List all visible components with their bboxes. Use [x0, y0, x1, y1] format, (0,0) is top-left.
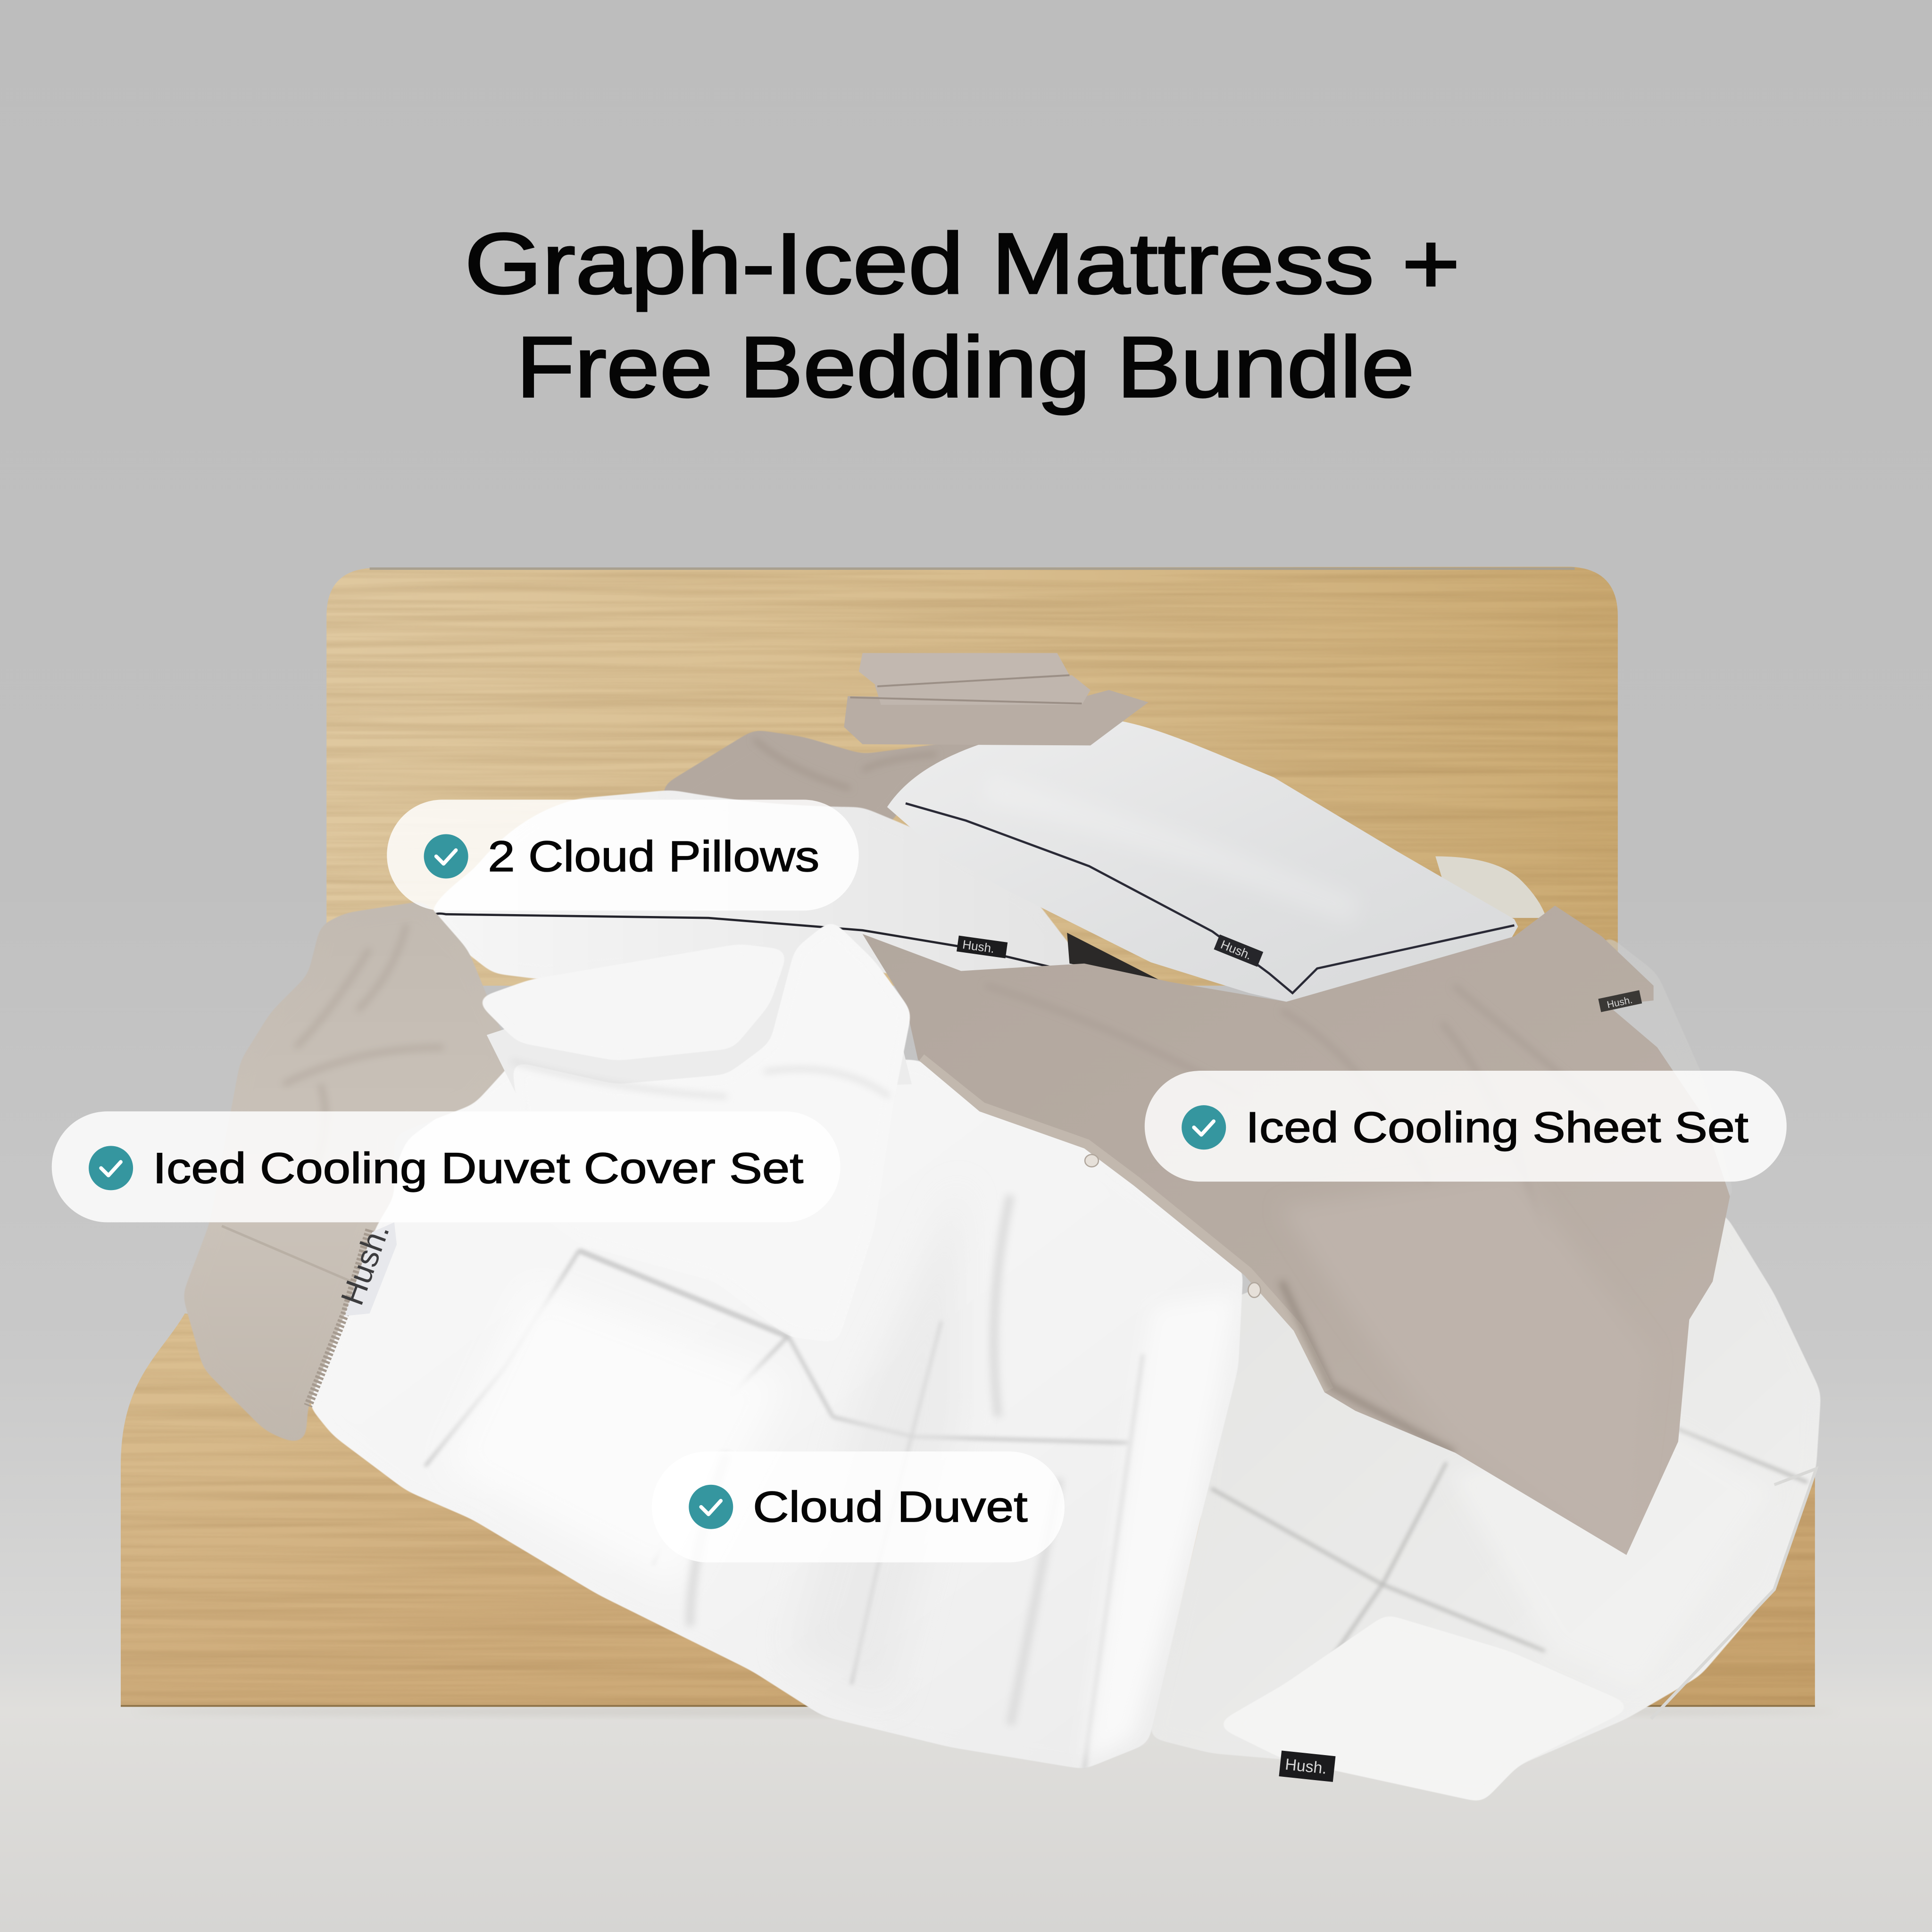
title: Graph-Iced Mattress +	[465, 215, 1460, 312]
white mattress edge at right	[1602, 930, 1737, 1208]
pillow label tag: Hush.	[1219, 937, 1254, 962]
title	[465, 215, 1460, 415]
top cover sheet draped over duvet	[863, 906, 1730, 1555]
pillow label tag: Hush.	[962, 937, 995, 956]
duvet main fold panels	[308, 1060, 1243, 1769]
check icon	[424, 834, 468, 879]
sheet corner label tag	[1598, 990, 1642, 1012]
sheet corner label tag: Hush.	[1606, 994, 1633, 1010]
sheet behind the pillows	[662, 702, 1152, 926]
check icon	[689, 1485, 733, 1529]
label pill: Iced Cooling Duvet Cover Set: Iced Cooling Duvet Cover Set	[153, 1144, 803, 1192]
pillow: back right cloud pillow	[887, 718, 1518, 1002]
label pill: Cloud Duvet	[652, 1451, 1065, 1562]
bed illustration	[111, 567, 1836, 1803]
right duvet quilting seams	[1211, 1427, 1816, 1803]
duvet upper fold and inner pillow roll	[475, 919, 912, 1343]
check icon	[1182, 1105, 1226, 1149]
pillow label tag	[1214, 934, 1263, 967]
title: Free Bedding Bundle	[516, 318, 1415, 415]
pillow label tag	[957, 935, 1008, 958]
bed headboard	[326, 567, 1618, 986]
shadow gap between pillows	[1067, 933, 1171, 986]
bed frame base	[111, 1306, 1824, 1713]
label pill: 2 Cloud Pillows	[387, 799, 859, 910]
sheet buttons	[1085, 1155, 1260, 1298]
label pill: Cloud Duvet: Cloud Duvet	[753, 1483, 1028, 1531]
pillow: front left cloud pillow	[431, 790, 1097, 992]
folded pillowcase stack	[844, 653, 1149, 745]
check icon	[89, 1146, 133, 1190]
fitted duvet cover sheet at left	[183, 901, 514, 1441]
duvet corner black label	[1279, 1750, 1335, 1782]
duvet corner black label: Hush.	[1284, 1756, 1328, 1778]
mattress topper behind pillow	[1435, 857, 1546, 918]
sheet fold shadows behind pillows	[754, 739, 936, 789]
fabric label tag on duvet: Hush.	[334, 1219, 396, 1310]
label pill: Iced Cooling Sheet Set	[1145, 1071, 1787, 1182]
label pill: Iced Cooling Sheet Set: Iced Cooling Sheet Set	[1246, 1104, 1749, 1152]
floor shadow under bed	[135, 1707, 1836, 1716]
right duvet panel	[1149, 1183, 1821, 1803]
label pill: 2 Cloud Pillows: 2 Cloud Pillows	[488, 833, 819, 881]
label pill: Iced Cooling Duvet Cover Set	[52, 1111, 841, 1222]
